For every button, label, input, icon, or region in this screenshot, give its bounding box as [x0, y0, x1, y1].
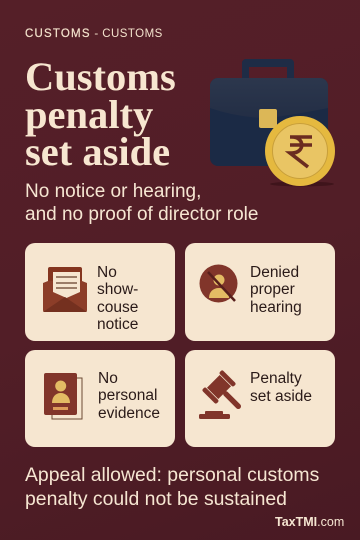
label: No — [97, 264, 117, 280]
label — [97, 264, 138, 333]
label: proper — [250, 281, 295, 298]
eyebrow label: CUSTOMS - CUSTOMS — [25, 28, 163, 40]
label: evidence — [98, 405, 160, 422]
label — [250, 264, 302, 316]
label: set aside — [250, 388, 312, 405]
label — [250, 370, 312, 405]
conclusion text — [25, 464, 319, 510]
subtitle: No notice or hearing, — [25, 181, 201, 202]
card: penalty set aside — [185, 350, 335, 447]
label: No — [98, 370, 118, 386]
card: denied proper hearing — [185, 243, 335, 341]
icon: open envelope — [43, 267, 87, 312]
conclusion text: Appeal allowed: personal customs — [25, 464, 319, 486]
title: set aside — [25, 129, 170, 174]
label: Denied — [250, 264, 299, 280]
conclusion text: penalty could not be sustained — [25, 488, 287, 510]
icon: identity document — [44, 373, 82, 420]
title — [25, 54, 176, 174]
card: no personal evidence — [25, 350, 175, 447]
label: show- — [97, 281, 138, 298]
label: Penalty — [250, 370, 302, 387]
subtitle: and no proof of director role — [25, 204, 258, 225]
icon: person crossed out — [200, 264, 238, 302]
title: Customs — [25, 54, 176, 99]
card: no show-cause notice — [25, 243, 175, 341]
title: penalty — [25, 92, 153, 136]
label: personal — [98, 387, 157, 404]
icon: gavel — [199, 370, 241, 419]
subtitle — [25, 181, 258, 225]
label: notice — [97, 316, 138, 333]
label: couse — [97, 299, 138, 316]
icon: briefcase with rupee coin — [210, 59, 335, 186]
label — [98, 370, 160, 422]
brand mark: TaxTMI.com — [275, 515, 344, 529]
label: hearing — [250, 299, 302, 316]
